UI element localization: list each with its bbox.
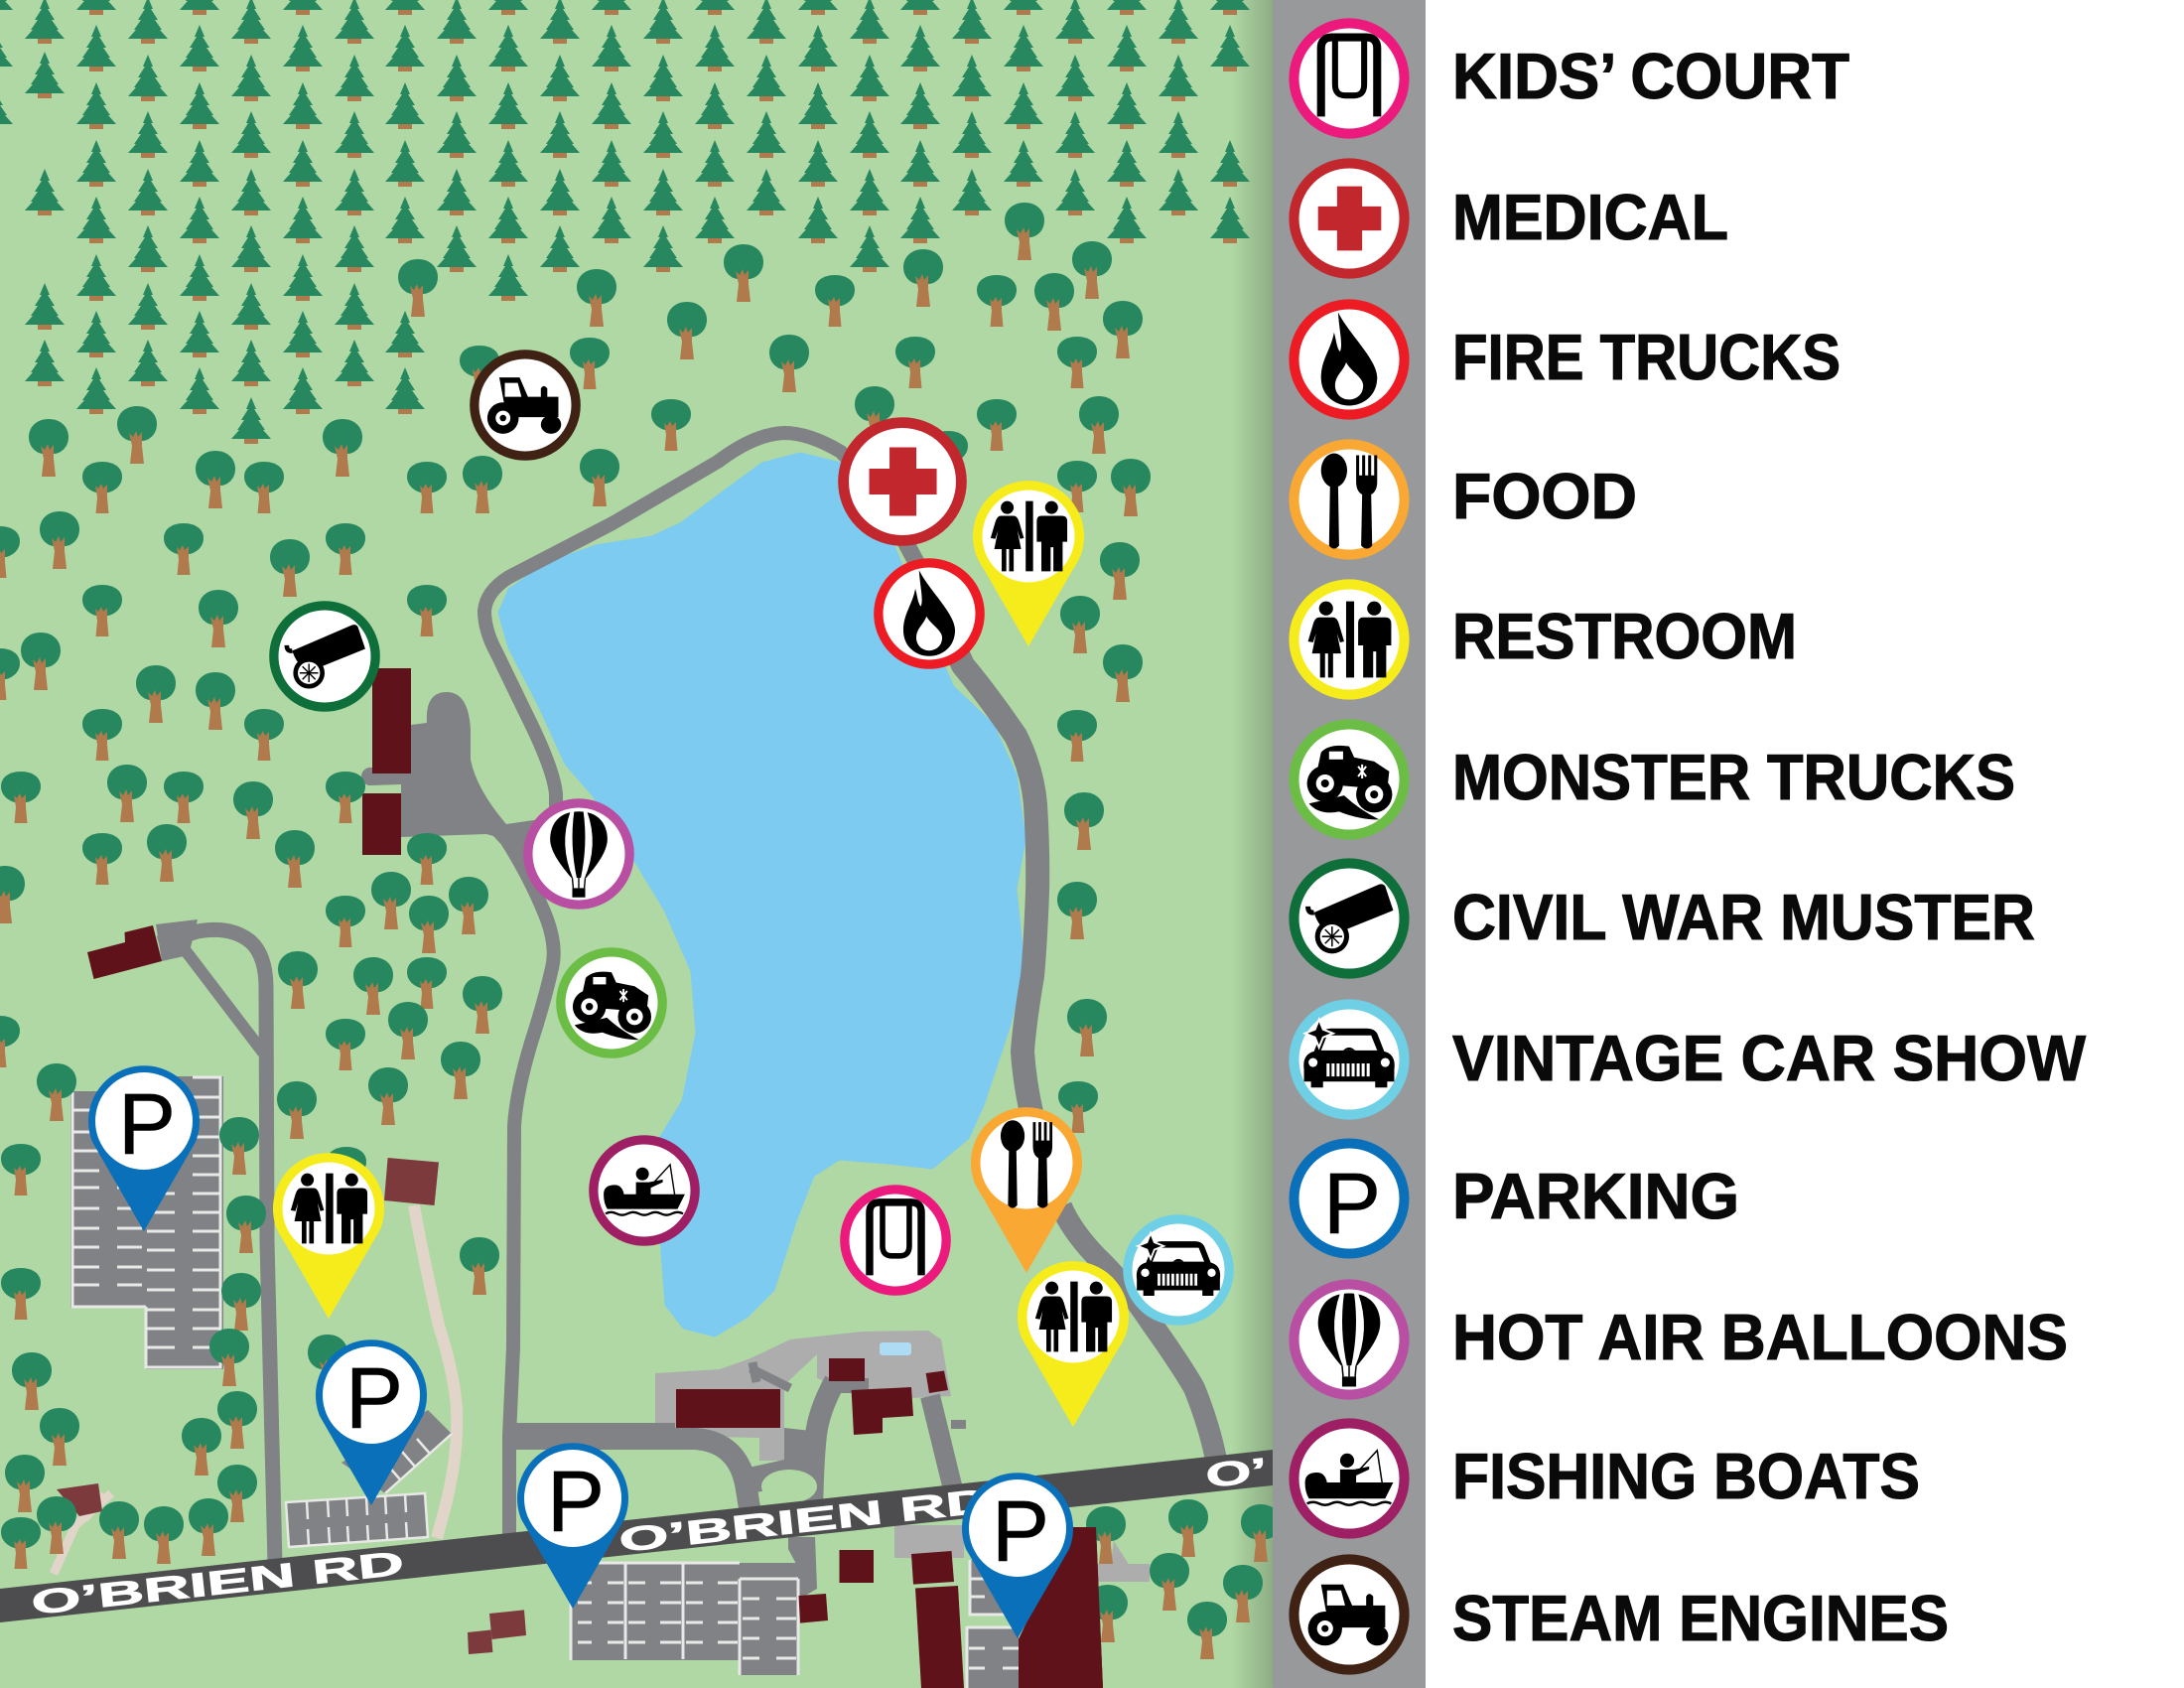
legend: civil war muster: CIVIL WAR MUSTER bbox=[1452, 881, 2035, 953]
parking lot east bbox=[967, 1560, 1019, 1688]
marker: monster trucks bbox=[561, 952, 662, 1054]
parking lot west bbox=[70, 1076, 223, 1369]
marker: fire trucks bbox=[879, 563, 980, 664]
pine forest bbox=[0, 0, 1250, 444]
legend: hot air balloons: HOT AIR BALLOONS bbox=[1452, 1301, 2068, 1373]
footpaths bbox=[54, 1205, 457, 1574]
marker: steam engines bbox=[475, 354, 576, 456]
pin: restroom west bbox=[273, 1153, 384, 1319]
pin: parking east bbox=[962, 1473, 1073, 1638]
legend: monster trucks: MONSTER TRUCKS bbox=[1452, 741, 2015, 813]
legend: fishing boats: FISHING BOATS bbox=[1452, 1440, 1920, 1512]
pin: parking south bbox=[517, 1443, 628, 1609]
road: O'Brien Rd bbox=[0, 1450, 1273, 1622]
pin: parking south: P bbox=[547, 1454, 605, 1550]
legend: fishing boats bbox=[1294, 1423, 1920, 1534]
legend: steam engines: STEAM ENGINES bbox=[1452, 1582, 1949, 1654]
pin: parking west bbox=[88, 1065, 200, 1231]
legend: hot air balloons bbox=[1294, 1284, 2068, 1395]
map background bbox=[0, 0, 1273, 1688]
parking lot central bbox=[286, 1410, 452, 1547]
pin: parking central: P bbox=[345, 1350, 403, 1447]
legend: monster trucks bbox=[1294, 724, 2015, 835]
marker: fishing boats bbox=[594, 1140, 695, 1241]
pin: food bbox=[971, 1107, 1082, 1273]
legend: steam engines bbox=[1294, 1559, 1949, 1670]
lake ring road bbox=[484, 433, 1216, 1534]
panel shadow bbox=[1231, 0, 1273, 1688]
legend: parking: PARKING bbox=[1452, 1160, 1739, 1232]
building over tree bbox=[1019, 1527, 1103, 1688]
parking lot south bbox=[570, 1563, 798, 1675]
legend: vintage car show bbox=[1294, 1004, 2087, 1115]
legend: fire trucks bbox=[1294, 304, 1841, 415]
pin: parking central bbox=[316, 1339, 427, 1505]
legend: food: FOOD bbox=[1452, 460, 1637, 532]
buildings bbox=[87, 668, 1103, 1688]
legend: medical bbox=[1294, 163, 1728, 274]
deciduous trees bbox=[0, 203, 1281, 1659]
marker: civil war muster bbox=[274, 606, 375, 707]
legend: medical: MEDICAL bbox=[1452, 181, 1728, 253]
west loop road bbox=[156, 919, 275, 1564]
legend: food bbox=[1294, 444, 1637, 555]
road: O'Brien Rd: O’ bbox=[1204, 1451, 1270, 1495]
legend: restroom: RESTROOM bbox=[1452, 600, 1797, 672]
pin: parking west: P bbox=[118, 1076, 176, 1173]
legend: kids' court: KIDS’ COURT bbox=[1452, 40, 1849, 112]
marker: hot air balloons bbox=[528, 803, 629, 905]
legend: fire trucks: FIRE TRUCKS bbox=[1452, 321, 1841, 393]
pin: restroom east bbox=[1018, 1261, 1129, 1427]
marker: kids' court bbox=[845, 1190, 946, 1291]
outbuildings bbox=[57, 1158, 526, 1654]
legend: civil war muster bbox=[1294, 863, 2035, 974]
pin: parking east: P bbox=[992, 1483, 1049, 1580]
road: O'Brien Rd: O’BRIEN RD bbox=[30, 1544, 406, 1622]
legend panel bbox=[1273, 0, 2184, 1688]
legend: vintage car show: VINTAGE CAR SHOW bbox=[1452, 1022, 2087, 1094]
legend: parking bbox=[1295, 1144, 1739, 1253]
legend: restroom bbox=[1294, 584, 1797, 695]
lake bbox=[499, 454, 1024, 1336]
legend: kids' court bbox=[1294, 23, 1849, 134]
marker: vintage car show bbox=[1128, 1219, 1229, 1321]
entrance plaza and drives bbox=[509, 1331, 1150, 1599]
road: O'Brien Rd: O’BRIEN RD bbox=[617, 1481, 994, 1560]
pin: restroom north bbox=[973, 481, 1084, 646]
barn yard pavement bbox=[361, 692, 561, 882]
marker: medical bbox=[844, 423, 961, 540]
legend: parking: P bbox=[1323, 1156, 1381, 1252]
